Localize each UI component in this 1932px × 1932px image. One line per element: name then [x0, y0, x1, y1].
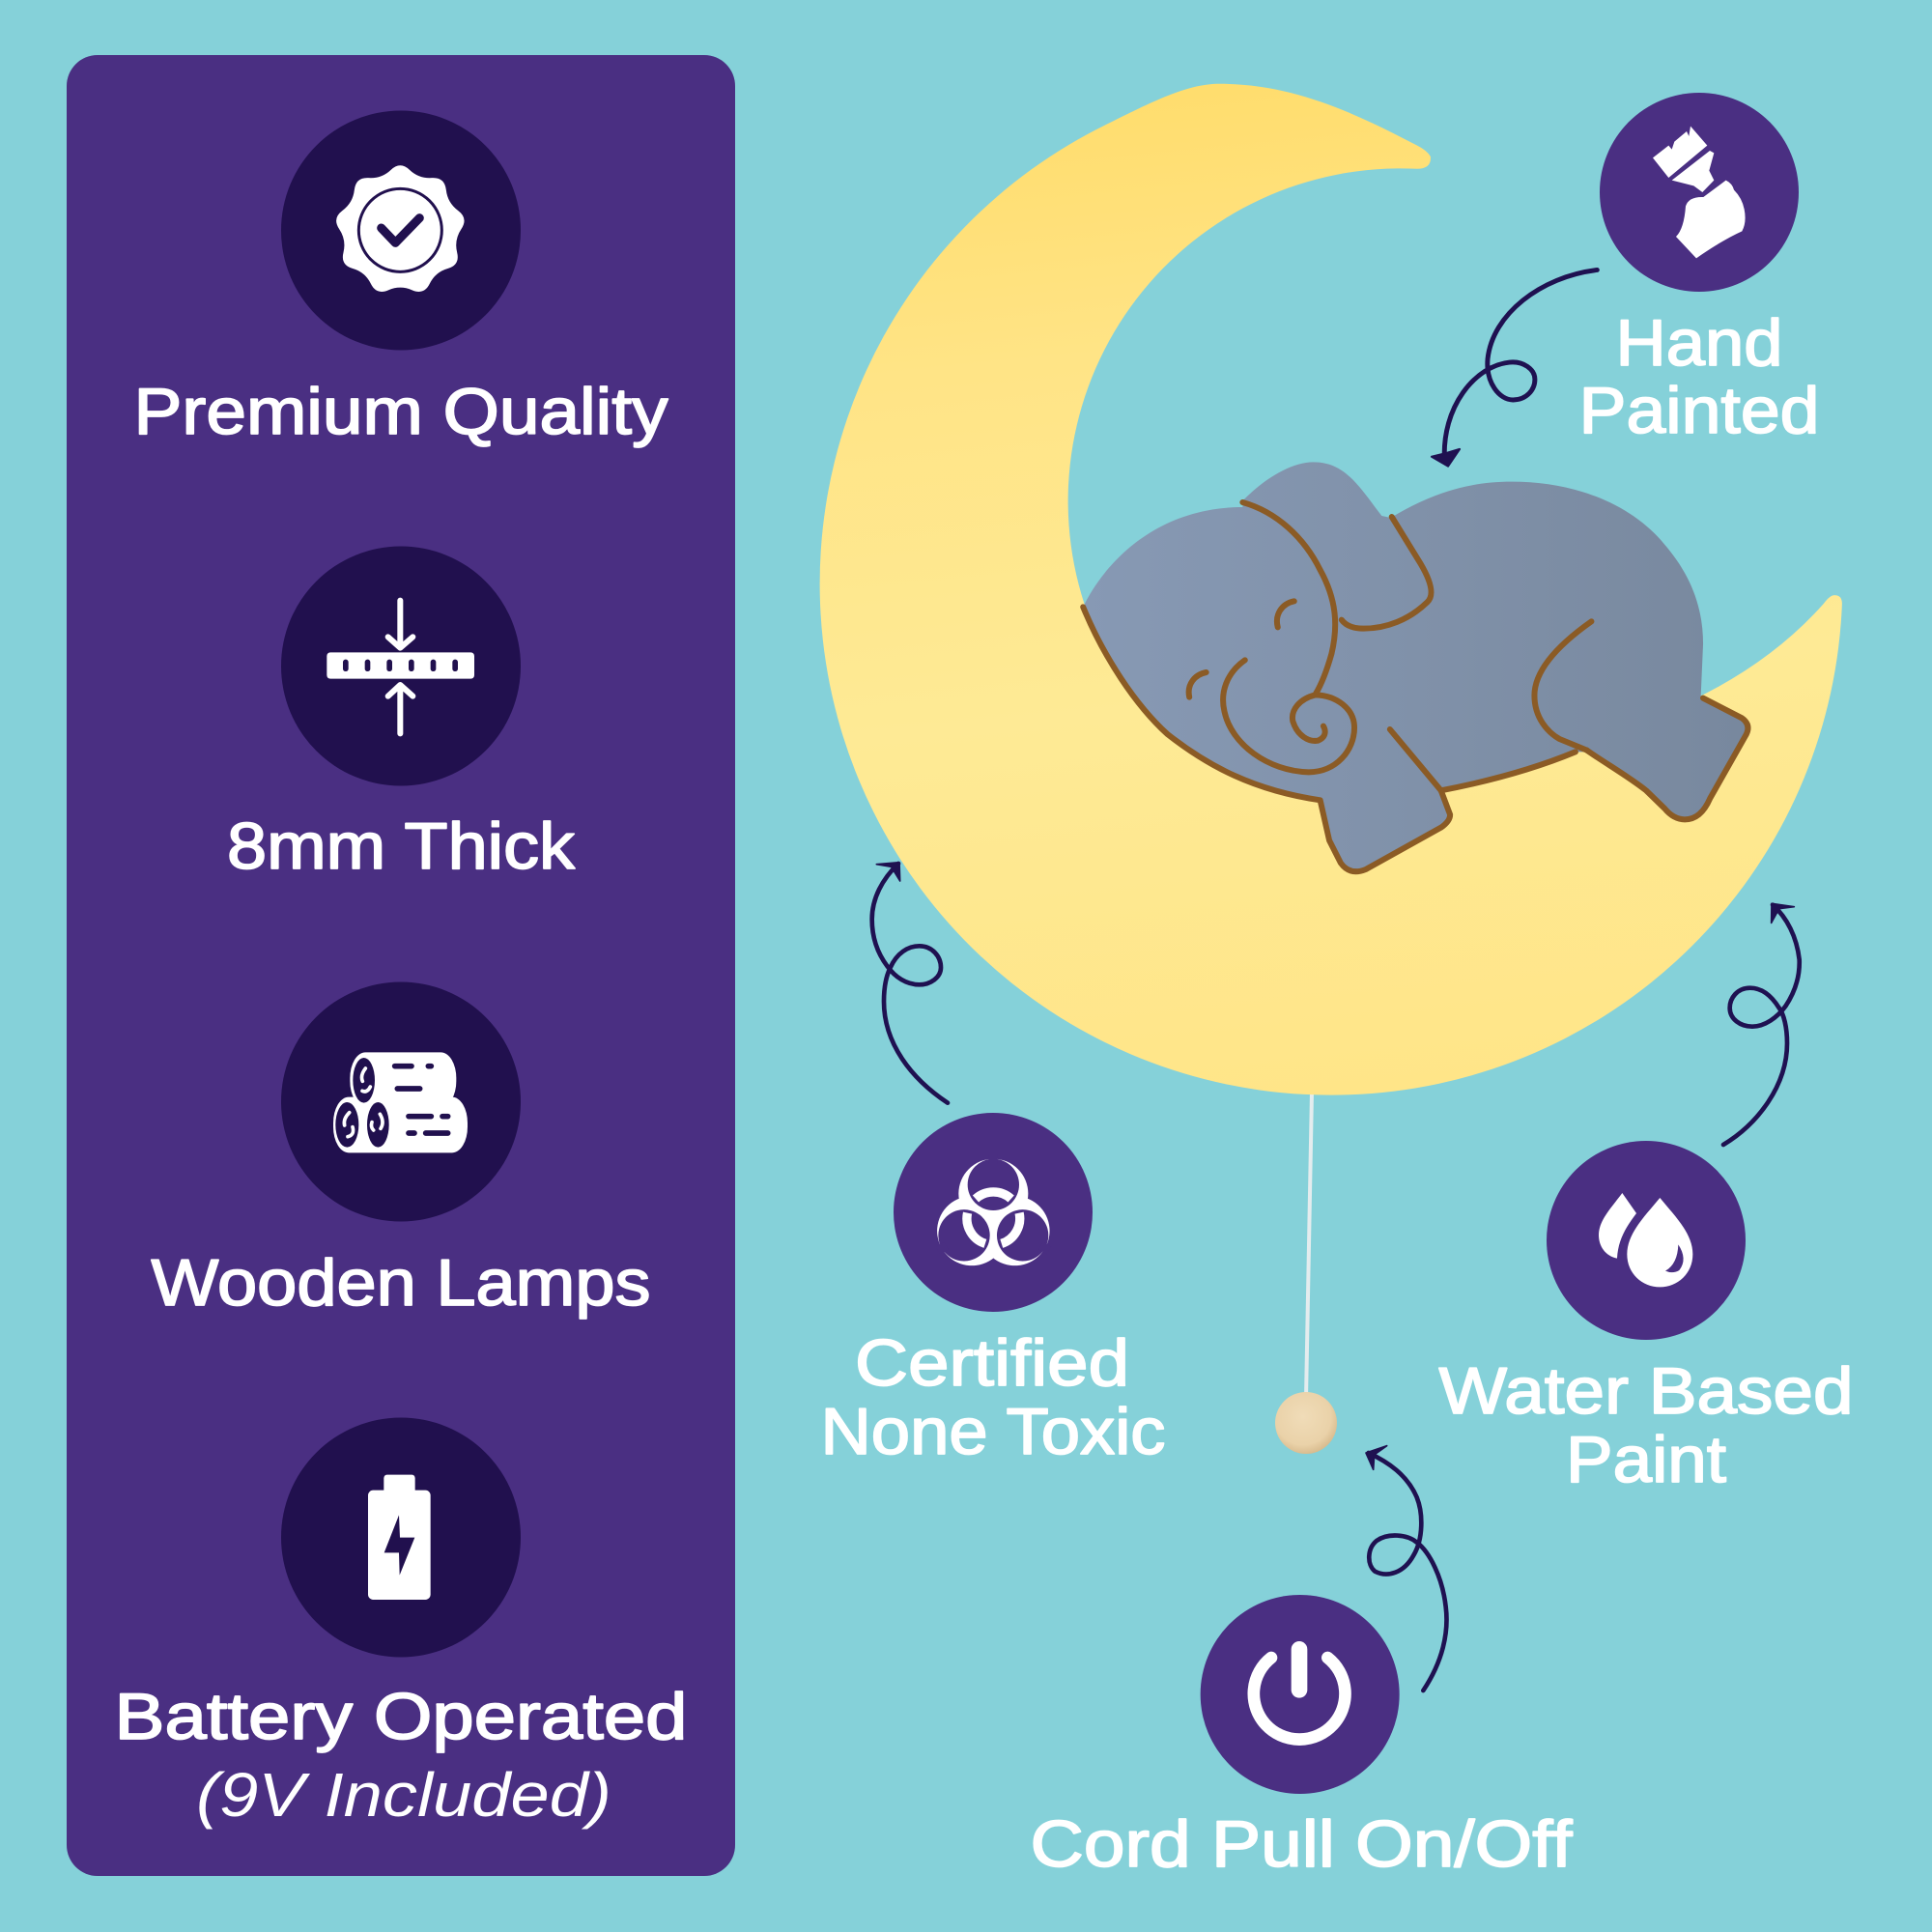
elephant — [1083, 462, 1747, 871]
wooden pull ball — [1275, 1392, 1337, 1454]
elephant body — [1083, 462, 1747, 871]
feature: wooden lamps — [151, 981, 651, 1320]
icon: biohazard — [894, 1113, 1093, 1312]
panel: features — [67, 55, 735, 1876]
label: 8mm thick: 8mm Thick — [227, 810, 576, 883]
label: hand painted — [1578, 306, 1820, 447]
product: moon lamp — [820, 84, 1842, 1454]
arrow: to elephant — [1432, 270, 1597, 467]
icon: water drops — [1547, 1141, 1746, 1340]
label: water based paint: Paint — [1566, 1423, 1726, 1496]
icon: power — [1201, 1595, 1400, 1794]
panel background — [67, 55, 735, 1876]
label: hand painted: Painted — [1578, 374, 1820, 447]
moon — [820, 84, 1842, 1095]
label: certified none toxic: None Toxic — [821, 1395, 1165, 1468]
label: certified none toxic: Certified — [855, 1326, 1129, 1400]
icon: thickness — [281, 547, 521, 786]
icon: hand holding brush — [1600, 93, 1799, 292]
label: certified none toxic — [821, 1326, 1165, 1468]
label: water based paint: Water Based — [1439, 1354, 1853, 1428]
callout: hand painted — [1432, 93, 1820, 467]
pull cord — [1306, 1092, 1312, 1399]
feature: battery operated — [114, 1418, 688, 1830]
callout: water based paint — [1439, 903, 1853, 1496]
label: water based paint — [1439, 1354, 1853, 1496]
arrow: to pull ball — [1366, 1446, 1446, 1690]
arrow: to moon left — [872, 863, 948, 1103]
label: battery operated: Battery Operated — [114, 1680, 688, 1753]
feature: premium quality — [133, 110, 668, 448]
callout: cord pull — [1030, 1446, 1573, 1881]
label: hand painted: Hand — [1615, 306, 1783, 380]
elephant outline — [1083, 607, 1747, 871]
feature: 8mm thick — [227, 547, 576, 883]
callout: certified non toxic — [821, 863, 1165, 1468]
label: cord pull on off: Cord Pull On/Off — [1030, 1807, 1573, 1881]
label: 9V included: (9V Included) — [196, 1760, 611, 1830]
arrow: to moon right — [1723, 903, 1800, 1145]
label: wooden lamps: Wooden Lamps — [151, 1246, 651, 1320]
label: premium quality: Premium Quality — [133, 375, 668, 448]
elephant cut lines — [1189, 502, 1591, 790]
icon: battery — [281, 1418, 521, 1658]
icon: wooden logs — [281, 981, 521, 1221]
icon: quality badge — [281, 110, 521, 350]
